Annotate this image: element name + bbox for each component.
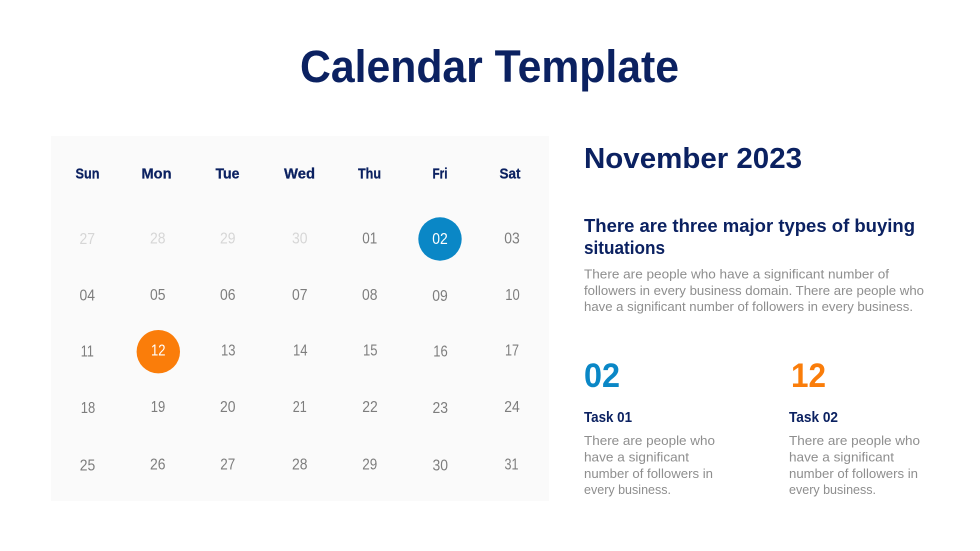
date grid: 29 — [220, 230, 236, 248]
date grid: 10 — [505, 287, 520, 304]
task 01 text: have a significant — [584, 450, 689, 464]
date grid: 29 — [362, 456, 377, 474]
date grid: 20 — [220, 399, 236, 416]
date grid: 31 — [504, 456, 519, 474]
date grid: 08 — [362, 287, 378, 304]
task 02 text: every business. — [789, 482, 876, 497]
task 02 text: There are people who — [789, 433, 920, 448]
task 02 number: 12 — [791, 357, 826, 395]
date grid: 22 — [362, 399, 378, 416]
date grid: 21 — [293, 399, 307, 416]
intro paragraph: have a significant number of followers in every business. — [584, 299, 913, 314]
panel: calendar — [51, 136, 549, 501]
task 02 label: Task 02 — [789, 410, 838, 426]
date grid: 30 — [292, 230, 308, 248]
date marker: 12 — [137, 330, 180, 373]
date grid: 06 — [220, 287, 236, 304]
weekday headers: Wed — [284, 166, 315, 182]
weekday headers: Thu — [358, 166, 381, 182]
title: Calendar Template — [300, 41, 679, 92]
task 02 text: number of followers in — [789, 466, 918, 481]
date grid: 15 — [363, 342, 378, 360]
task 01 label: Task 01 — [584, 410, 632, 426]
task 01 — [584, 357, 715, 497]
task 02 text: have a significant — [789, 450, 894, 464]
weekday headers: Tue — [216, 166, 240, 182]
weekday headers: Mon — [142, 166, 172, 182]
month heading: November 2023 — [584, 143, 802, 175]
date grid: 24 — [504, 399, 520, 416]
subheading: There are three major types of buying — [584, 215, 915, 236]
date grid: 12 — [151, 342, 166, 360]
intro paragraph: followers in every business domain. There are people who — [584, 283, 924, 298]
date grid: 25 — [80, 458, 95, 474]
date grid: 07 — [292, 287, 308, 304]
date grid: 30 — [433, 458, 448, 474]
date grid: 23 — [433, 400, 448, 417]
task 01 text: every business. — [584, 482, 671, 497]
date grid: 26 — [150, 456, 166, 474]
date grid: 27 — [80, 231, 95, 248]
weekday headers: Sat — [500, 166, 521, 182]
subheading — [584, 215, 915, 258]
date grid: 11 — [81, 344, 94, 360]
date grid: 09 — [432, 288, 448, 305]
date grid: 14 — [293, 342, 308, 360]
date grid: 27 — [220, 456, 235, 474]
date grid: 18 — [81, 400, 95, 417]
intro paragraph — [584, 266, 924, 314]
date grid: 28 — [292, 456, 308, 474]
weekday headers: Sun — [76, 166, 100, 182]
task 01 text — [584, 433, 715, 497]
task 02 — [789, 357, 920, 497]
date grid: 13 — [221, 342, 236, 360]
date grid: 19 — [151, 399, 165, 416]
weekday headers: Fri — [432, 166, 448, 182]
date grid: 03 — [504, 230, 520, 248]
task 01 number: 02 — [584, 357, 620, 395]
date grid: 28 — [150, 230, 166, 248]
intro paragraph: There are people who have a significant number of — [584, 266, 889, 282]
weekday headers — [76, 166, 521, 182]
date grid: 01 — [362, 230, 377, 248]
task 01 text: There are people who — [584, 433, 715, 448]
subheading: situations — [584, 237, 665, 258]
date marker: 02 — [418, 217, 462, 261]
task 01 text: number of followers in — [584, 466, 713, 481]
date grid: 04 — [80, 288, 95, 304]
date grid — [80, 230, 520, 474]
date grid: 17 — [505, 342, 519, 360]
date grid: 16 — [433, 344, 448, 360]
task 02 text — [789, 433, 920, 497]
date grid: 05 — [150, 287, 166, 304]
date grid: 02 — [432, 231, 448, 248]
